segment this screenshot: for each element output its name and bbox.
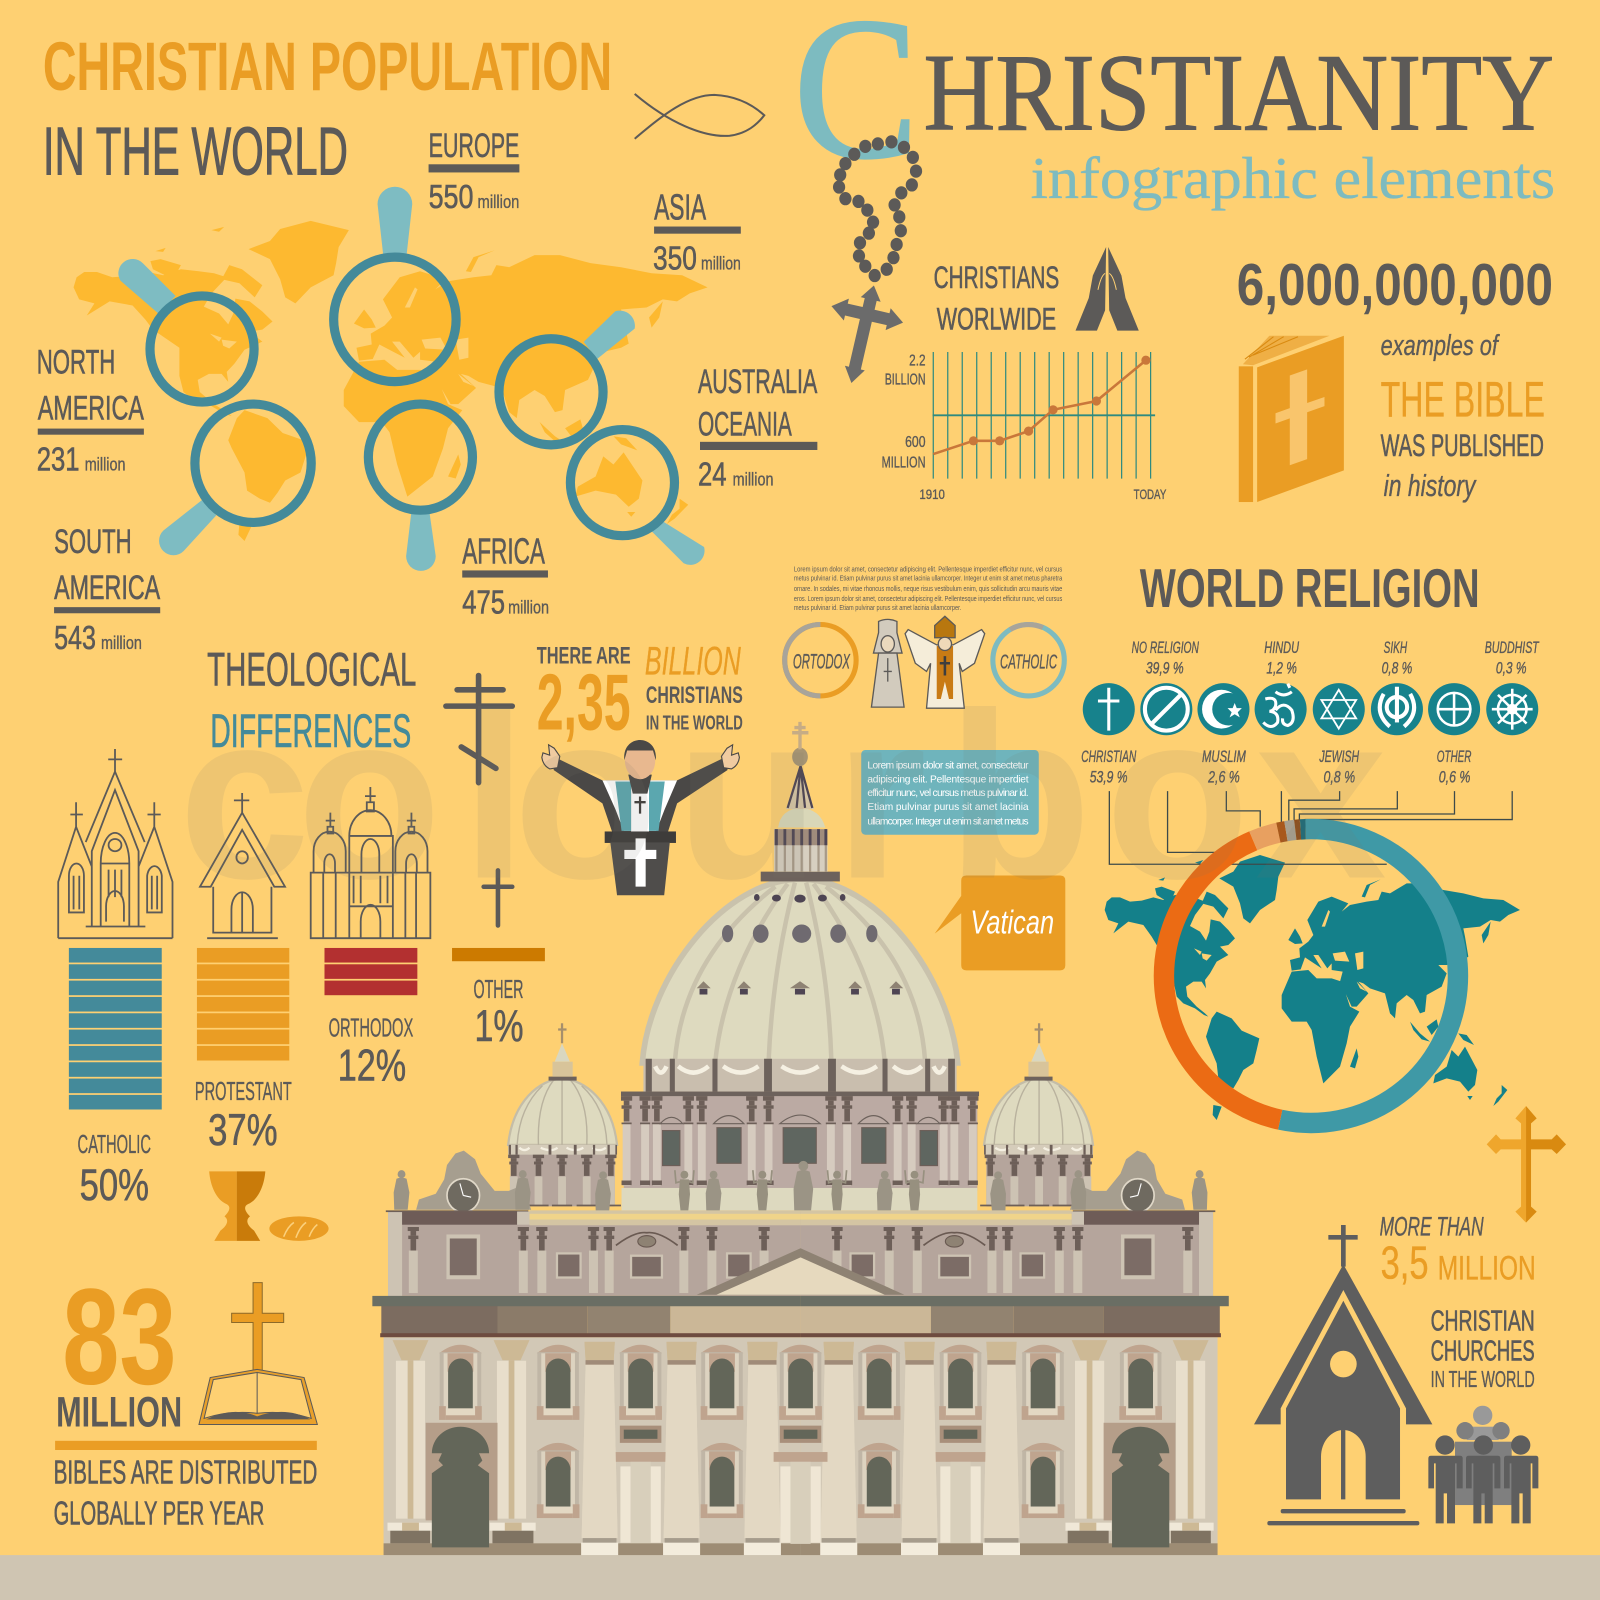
text block: lorem: metus pulvinar id. Etiam pulvinar purus sit amet lacinia ullamcorper. <box>794 603 961 612</box>
icon: catholic church <box>58 749 173 938</box>
label: australia oceania <box>698 363 818 494</box>
text: churches: CHURCHES <box>1431 1336 1535 1368</box>
icon: bible book <box>1239 336 1344 502</box>
heading: THEOLOGICAL <box>207 644 416 696</box>
text: bibles are distributed: BIBLES ARE DISTRIBUTED <box>54 1455 317 1492</box>
icon: no religion <box>1145 688 1188 731</box>
figure: preacher <box>542 740 739 895</box>
magnifier: africa <box>368 404 472 571</box>
icon: fish <box>635 94 764 139</box>
label: australia oceania: million <box>733 469 773 490</box>
label: south america: 543 <box>54 620 96 657</box>
panel: 83 million bibles <box>54 1260 317 1532</box>
label: other <box>473 976 523 1051</box>
line chart: MILLION <box>882 454 926 471</box>
text: examples of: examples of <box>1381 330 1500 362</box>
text block: lorem: eros. Lorem ipsum dolor sit amet, consectetur adipiscing elit. Pellentesque imperdiet efficitur nunc, vel cursus <box>794 594 1062 603</box>
label: south america: SOUTH <box>54 523 132 561</box>
lantern <box>761 722 840 881</box>
label: australia oceania: AUSTRALIA <box>698 363 818 401</box>
labels: religion bottom row: JEWISH <box>1319 748 1359 766</box>
text: million: MILLION <box>1438 1250 1536 1288</box>
ortodox ring <box>785 624 856 696</box>
icon: cross <box>1098 688 1119 731</box>
text: more than: MORE THAN <box>1380 1212 1484 1242</box>
text block: lorem: metus pulvinar id. Etiam pulvinar purus sit amet lacinia ullamcorper. Integer ut enim sit amet metus pharetra <box>794 574 1063 583</box>
magnifier: europe <box>334 187 456 382</box>
number: 83 <box>62 1260 177 1413</box>
icon: cross on open bible <box>199 1283 317 1424</box>
text: 3,5: 3,5 <box>1381 1237 1429 1289</box>
catholic ring: CATHOLIC <box>1000 651 1057 673</box>
number: 2,35 <box>537 658 631 747</box>
label: orthodox: 12% <box>338 1040 406 1091</box>
labels: religion top row: 0,3 % <box>1496 659 1527 677</box>
label: orthodox: ORTHODOX <box>329 1015 413 1043</box>
icons: religion symbols <box>1083 683 1538 735</box>
labels: religion bottom row: 0,8 % <box>1323 769 1355 787</box>
map: teal world <box>1105 855 1520 1120</box>
labels: religion bottom row <box>1081 748 1472 787</box>
map: yellow world <box>74 221 708 541</box>
line chart: 600 <box>905 434 926 451</box>
icon: small cross <box>484 870 512 926</box>
panel: bible count <box>1237 251 1553 503</box>
line chart: 2.2 <box>909 352 926 369</box>
bar: other <box>452 948 545 961</box>
label: protestant: 37% <box>208 1104 278 1155</box>
icon: orange cross <box>1487 1106 1566 1223</box>
illustration: st peter's basilica <box>372 722 1229 1555</box>
label: africa <box>462 531 549 621</box>
labels: religion top row: 0,8 % <box>1382 659 1412 677</box>
magnifier: south america <box>159 404 311 555</box>
callout: vatican <box>935 876 1065 970</box>
text: christians worldwide: WORLWIDE <box>937 301 1056 337</box>
label: other: OTHER <box>473 976 523 1004</box>
callout: blue note: Lorem ipsum dolor sit amet, consectetur <box>867 760 1029 771</box>
label: australia oceania: 24 <box>698 457 727 494</box>
label: south america <box>54 523 161 657</box>
icon: bread <box>269 1216 329 1241</box>
text: globally per year: GLOBALLY PER YEAR <box>54 1495 264 1532</box>
icon: om <box>1263 684 1293 727</box>
label: africa: million <box>508 596 549 617</box>
labels: religion bottom row: 53,9 % <box>1090 769 1128 787</box>
label: africa: 475 <box>462 584 505 621</box>
line chart: BILLION <box>885 372 926 389</box>
label: north america: NORTH <box>37 343 115 381</box>
labels: religion top row: 39,9 % <box>1146 659 1184 677</box>
icon: star of david <box>1321 690 1356 729</box>
magnifier: north america <box>118 259 254 402</box>
heading: in the world: IN THE WORLD <box>43 114 348 189</box>
labels: religion top row: NO RELIGION <box>1132 639 1199 657</box>
icon: protestant church <box>200 793 285 938</box>
icon: circle cross <box>1438 693 1470 726</box>
label: africa: AFRICA <box>462 531 545 571</box>
icon: orthodox cross <box>446 676 512 783</box>
callout: blue note: efficitur nunc, vel cursus metus pulvinar id. <box>867 788 1029 799</box>
labels: religion bottom row: MUSLIM <box>1202 748 1246 766</box>
subtitle: infographic elements <box>1031 145 1555 211</box>
text: christians worldwide <box>934 259 1059 337</box>
icon: chalice <box>209 1171 265 1241</box>
ortodox ring: ORTODOX <box>793 649 850 673</box>
labels: religion bottom row: CHRISTIAN <box>1081 748 1136 766</box>
ground <box>0 1555 1600 1600</box>
figure: pope <box>905 616 985 708</box>
heading accent: DIFFERENCES <box>210 705 411 757</box>
text: christians worldwide: CHRISTIANS <box>934 259 1059 295</box>
basilica right half <box>801 1023 1229 1555</box>
text: in the world: IN THE WORLD <box>646 713 743 735</box>
panel: theological differences <box>58 644 545 1210</box>
labels: religion top row <box>1132 639 1539 677</box>
icon: khanda <box>1380 687 1414 727</box>
icon: dharma wheel <box>1492 689 1533 730</box>
labels: religion bottom row: 2,6 % <box>1207 769 1240 787</box>
labels: religion top row: 1,2 % <box>1266 659 1297 677</box>
label: south america: million <box>101 632 142 653</box>
heading: christian population: CHRISTIAN POPULATION <box>43 29 612 105</box>
text block: lorem: Lorem ipsum dolor sit amet, consectetur adipiscing elit. Pellentesque imperdiet efficitur nunc, vel cursus <box>794 564 1062 573</box>
main drum <box>621 1092 979 1210</box>
line chart <box>882 352 1167 503</box>
label: protestant: PROTESTANT <box>195 1078 292 1106</box>
callout: blue note: adipiscing elit. Pellentesque imperdiet <box>867 775 1029 786</box>
label: asia: million <box>701 252 741 273</box>
label: europe: 550 <box>429 179 473 216</box>
bar <box>55 1441 317 1450</box>
label: north america: million <box>85 453 126 474</box>
labels: religion top row: HINDU <box>1264 639 1299 657</box>
icon: people <box>1428 1406 1538 1523</box>
text: there are: THERE ARE <box>537 642 631 669</box>
label: protestant <box>195 1078 292 1155</box>
basilica left half <box>372 1023 801 1555</box>
label: asia <box>653 187 741 277</box>
label: asia: ASIA <box>654 187 706 227</box>
callout: blue note: Etiam pulvinar purus sit amet lacinia <box>867 802 1029 813</box>
icon: rosary <box>816 135 922 391</box>
connector lines <box>1109 791 1512 864</box>
label: europe <box>429 127 519 216</box>
label: europe: EUROPE <box>429 127 519 165</box>
callout: vatican: Vatican <box>970 905 1054 942</box>
text block: lorem: ornare. In sodales, mi vitae rhoncus mollis, neque risus vestibulum enim, quis sollicitudin arcu mauris vitae <box>794 584 1062 593</box>
label: north america: AMERICA <box>38 389 144 427</box>
text: christian: CHRISTIAN <box>1431 1306 1535 1338</box>
text: in history: in history <box>1384 469 1477 503</box>
bars: catholic <box>69 948 162 1109</box>
labels: religion top row: SIKH <box>1384 639 1407 657</box>
panel: christian population <box>37 29 818 657</box>
panel: christian churches <box>1254 1212 1538 1525</box>
label: catholic: 50% <box>80 1159 149 1210</box>
label: europe: million <box>478 191 519 212</box>
line chart: TODAY <box>1134 487 1167 503</box>
magnifier: australia <box>570 430 705 565</box>
callout: blue note: ullamcorper. Integer ut enim sit amet metus <box>867 816 1029 827</box>
text: in the world: IN THE WORLD <box>1431 1366 1535 1392</box>
text block: lorem <box>794 564 1063 612</box>
label: catholic: CATHOLIC <box>78 1131 151 1159</box>
label: catholic <box>78 1131 151 1210</box>
label: australia oceania: OCEANIA <box>698 406 792 444</box>
icon: crescent <box>1202 690 1245 729</box>
icon: orthodox church <box>311 787 430 938</box>
text: million: MILLION <box>56 1389 182 1437</box>
watermark: colourbox <box>179 665 1387 929</box>
icon: praying hands <box>1076 247 1139 331</box>
line chart: 1910 <box>919 487 945 503</box>
text: christians: CHRISTIANS <box>646 682 743 709</box>
title <box>794 0 1555 211</box>
text: billion: BILLION <box>645 639 741 683</box>
callout: blue note <box>861 750 1039 835</box>
bars: protestant <box>197 948 289 1061</box>
icon: church <box>1254 1225 1432 1525</box>
main dome <box>642 879 958 1092</box>
label: asia: 350 <box>653 240 697 277</box>
magnifier: asia <box>499 311 635 445</box>
labels: religion top row: BUDDHIST <box>1485 639 1539 657</box>
label: orthodox <box>329 1015 413 1091</box>
label: other: 1% <box>474 1000 523 1051</box>
labels: religion bottom row: 0,6 % <box>1439 769 1470 787</box>
figure: orthodox priest <box>871 619 904 707</box>
label: north america <box>37 343 144 478</box>
basilica centre facade <box>697 1248 904 1544</box>
bars: orthodox <box>324 948 417 995</box>
statues <box>675 1161 924 1210</box>
panel: 2,35 billion <box>537 639 743 747</box>
donut chart <box>1164 829 1458 1123</box>
catholic ring <box>993 624 1064 696</box>
labels: religion bottom row: OTHER <box>1437 748 1472 766</box>
label: south america: AMERICA <box>54 569 161 607</box>
label: north america: 231 <box>37 441 80 478</box>
